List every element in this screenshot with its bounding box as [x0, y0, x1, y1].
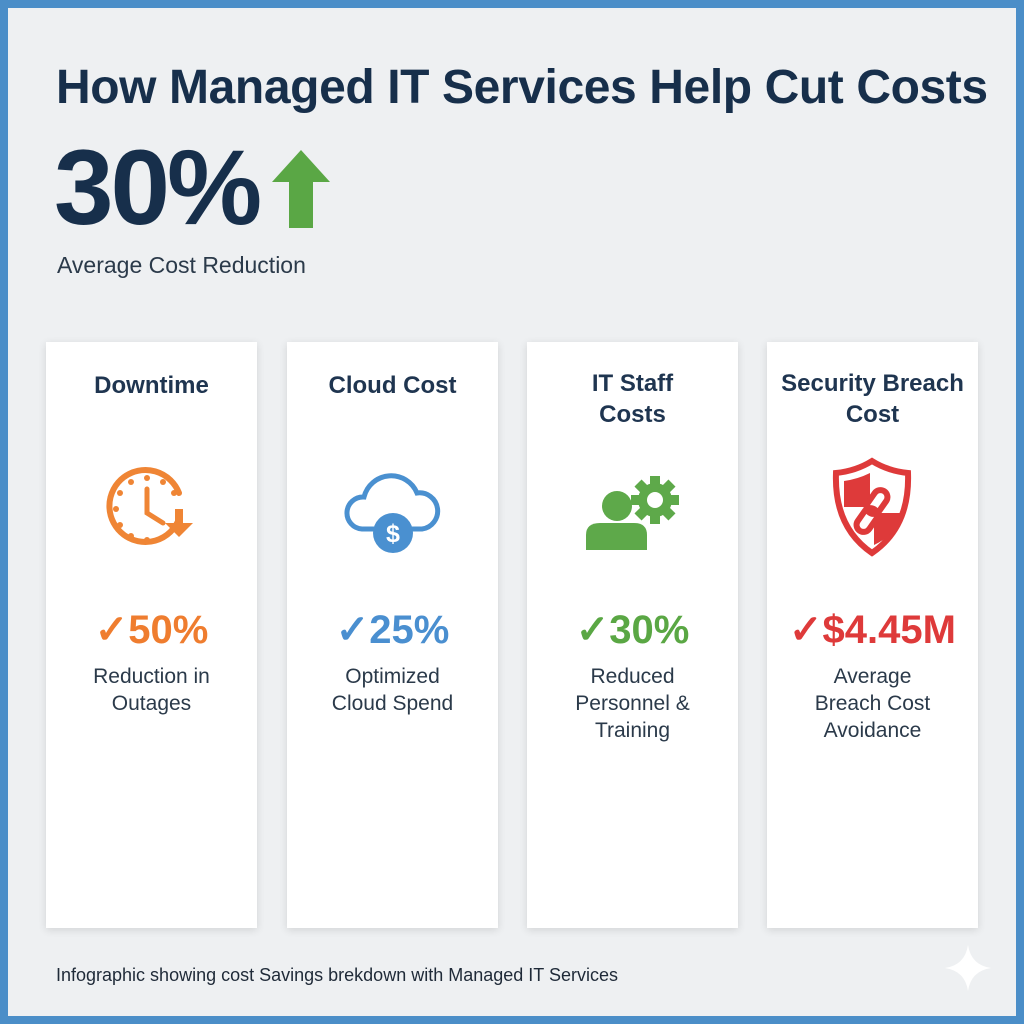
icon: clock — [106, 467, 193, 545]
icon: cloud dollar: $ — [386, 520, 400, 548]
description — [332, 665, 453, 715]
heading: Cost — [846, 401, 899, 428]
description: Personnel & — [575, 692, 690, 715]
heading: Security Breach — [781, 370, 964, 397]
icon: green up arrow — [272, 150, 330, 228]
heading: Downtime — [94, 372, 209, 399]
description — [815, 665, 930, 742]
subtitle: Average Cost Reduction — [57, 252, 306, 278]
description: Optimized — [345, 665, 440, 688]
heading — [781, 370, 964, 428]
icon: cloud dollar — [344, 473, 440, 553]
icon: sparkle — [946, 946, 990, 990]
panel: downtime — [46, 342, 257, 928]
heading: IT Staff — [592, 370, 673, 397]
description: Avoidance — [824, 719, 921, 742]
heading: Cloud Cost — [328, 372, 456, 399]
footer caption: Infographic showing cost Savings brekdown with Managed IT Services — [56, 965, 618, 985]
description: Average — [834, 665, 911, 688]
panel: security breach — [767, 342, 978, 928]
description: Reduced — [590, 665, 675, 688]
heading — [592, 370, 674, 428]
description: Cloud Spend — [332, 692, 453, 715]
description — [575, 665, 690, 742]
value: ✓30% — [576, 608, 689, 652]
heading: Costs — [599, 401, 666, 428]
description — [93, 665, 210, 715]
value: ✓25% — [336, 608, 449, 652]
description: Reduction in — [93, 665, 210, 688]
value: ✓50% — [95, 608, 208, 652]
icon: person gear — [586, 476, 679, 550]
panel: IT staff — [527, 342, 738, 928]
description: Outages — [112, 692, 191, 715]
description: Breach Cost — [815, 692, 930, 715]
value: ✓$4.45M — [789, 608, 956, 652]
panel: cloud cost — [287, 342, 498, 928]
icon: shield — [832, 458, 912, 557]
title: How Managed IT Services Help Cut Costs — [56, 61, 988, 114]
headline stat: 30% — [54, 127, 259, 247]
description: Training — [595, 719, 670, 742]
